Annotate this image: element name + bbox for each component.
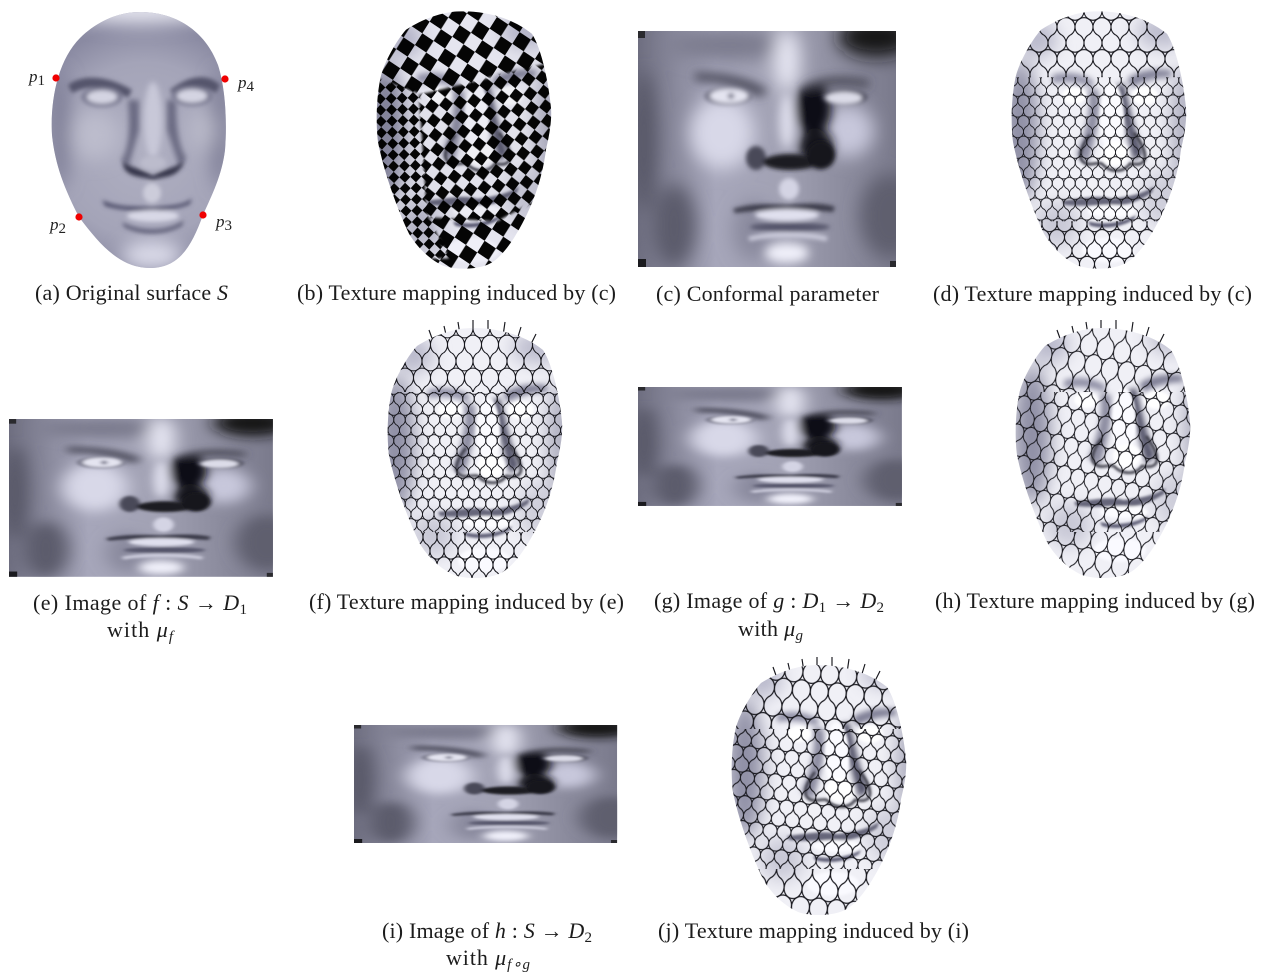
- landmark p2: [49, 213, 83, 237]
- caption h: (h) Texture mapping induced by (g): [935, 588, 1255, 613]
- caption e: [33, 590, 247, 645]
- caption g: (g) Image of g : D: [654, 588, 818, 613]
- panel: (h) mesh texture mapping: [936, 320, 1254, 613]
- caption g: [654, 588, 884, 644]
- caption f: (f) Texture mapping induced by (e): [309, 589, 624, 614]
- landmark p3: 3: [224, 218, 232, 234]
- caption g: D: [859, 588, 876, 613]
- caption g: g: [796, 628, 804, 644]
- landmark p1: [28, 67, 60, 89]
- image g: [632, 380, 926, 506]
- landmark p4: 4: [246, 79, 254, 95]
- panel: (e) image of f: [3, 410, 297, 645]
- caption i: (i) Image of h : S → D: [382, 918, 584, 943]
- landmark p2: 2: [58, 221, 66, 237]
- caption g: 2: [876, 600, 884, 616]
- landmark p4: [221, 73, 254, 95]
- caption e: f: [169, 629, 175, 645]
- caption e: (e) Image of f : S → D: [33, 590, 239, 615]
- caption i: [382, 918, 592, 973]
- caption i: f∘g: [507, 957, 530, 973]
- image e: [3, 410, 297, 578]
- caption e: with μ: [107, 617, 168, 642]
- landmark p3: [199, 211, 232, 234]
- mesh face h: [1016, 320, 1190, 578]
- caption i: with μ: [446, 945, 506, 970]
- panel: (d) circle texture mapping: [933, 0, 1252, 306]
- panel: (j) mesh texture mapping: [658, 657, 968, 943]
- landmark p4: p: [238, 73, 246, 92]
- face surface a: [52, 12, 226, 268]
- mesh face j: [732, 657, 906, 915]
- panel: (i) image of h: [348, 718, 642, 973]
- panel: (a) original surface: [28, 0, 254, 305]
- panel: (f) mesh texture mapping: [309, 295, 624, 614]
- landmark p1: p: [29, 67, 38, 86]
- face with checker texture: [376, 11, 552, 269]
- image c: [632, 17, 920, 268]
- panel: (c) conformal parameter: [632, 17, 920, 306]
- face with circle mesh: [1012, 11, 1186, 269]
- caption d: (d) Texture mapping induced by (c): [933, 281, 1252, 306]
- panel: (b) checkerboard texture mapping: [297, 0, 616, 305]
- caption j: (j) Texture mapping induced by (i): [658, 918, 969, 943]
- mesh face f: [388, 320, 562, 578]
- caption g: 1: [819, 600, 826, 616]
- landmark p3: p: [216, 212, 224, 231]
- caption g: with μ: [738, 616, 795, 641]
- caption e: 1: [240, 602, 247, 618]
- caption c: (c) Conformal parameter: [656, 281, 880, 306]
- caption i: 2: [584, 930, 592, 946]
- landmark p2: p: [50, 215, 58, 234]
- panel: (g) image of g: [632, 380, 926, 644]
- caption a: (a) Original surface S: [35, 280, 228, 305]
- landmark p1: 1: [38, 73, 45, 89]
- caption g: →: [826, 588, 860, 613]
- caption b: (b) Texture mapping induced by (c): [297, 280, 616, 305]
- image i: [348, 718, 642, 844]
